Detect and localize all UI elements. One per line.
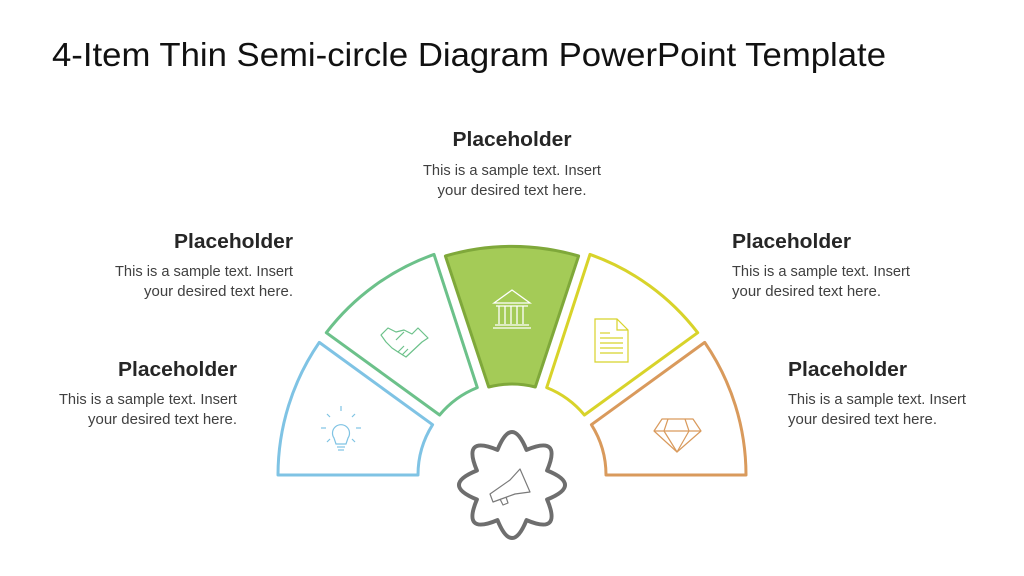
text block: lower left: Placeholder <box>118 359 237 381</box>
segment: orange <box>591 342 746 475</box>
center gear with megaphone <box>459 432 565 538</box>
text block: lower right: This is a sample text. Insert <box>788 392 966 408</box>
segment: center highlighted <box>445 246 579 387</box>
icon: diamond <box>654 419 701 452</box>
text block: lower right <box>788 359 966 428</box>
text block: top <box>423 129 601 199</box>
icon: bank building <box>493 290 531 328</box>
icon: handshake <box>381 328 428 357</box>
text block: upper left <box>115 231 293 300</box>
segment: green <box>326 254 477 415</box>
text block: top: Placeholder <box>452 129 572 151</box>
text block: upper right: your desired text here. <box>732 284 881 300</box>
icon: light bulb <box>321 406 361 450</box>
text block: lower left: your desired text here. <box>88 412 237 428</box>
text block: lower right: your desired text here. <box>788 412 937 428</box>
text block: upper left: This is a sample text. Insert <box>115 264 293 280</box>
text block: upper left: Placeholder <box>174 231 293 253</box>
text block: upper right: Placeholder <box>732 231 851 253</box>
icon: megaphone <box>490 469 530 505</box>
icon: document <box>595 319 628 362</box>
text block: upper left: your desired text here. <box>144 284 293 300</box>
text block: lower left: This is a sample text. Insert <box>59 392 237 408</box>
text block: lower left <box>59 359 237 428</box>
segment: yellow <box>547 254 698 415</box>
segment: blue <box>278 342 433 475</box>
title: 4-Item Thin Semi-circle Diagram PowerPoint Template <box>52 36 886 73</box>
text block: upper right <box>732 231 910 300</box>
text block: top: your desired text here. <box>438 183 586 199</box>
text block: upper right: This is a sample text. Insert <box>732 264 910 280</box>
text block: lower right: Placeholder <box>788 359 907 381</box>
text block: top: This is a sample text. Insert <box>423 163 601 179</box>
